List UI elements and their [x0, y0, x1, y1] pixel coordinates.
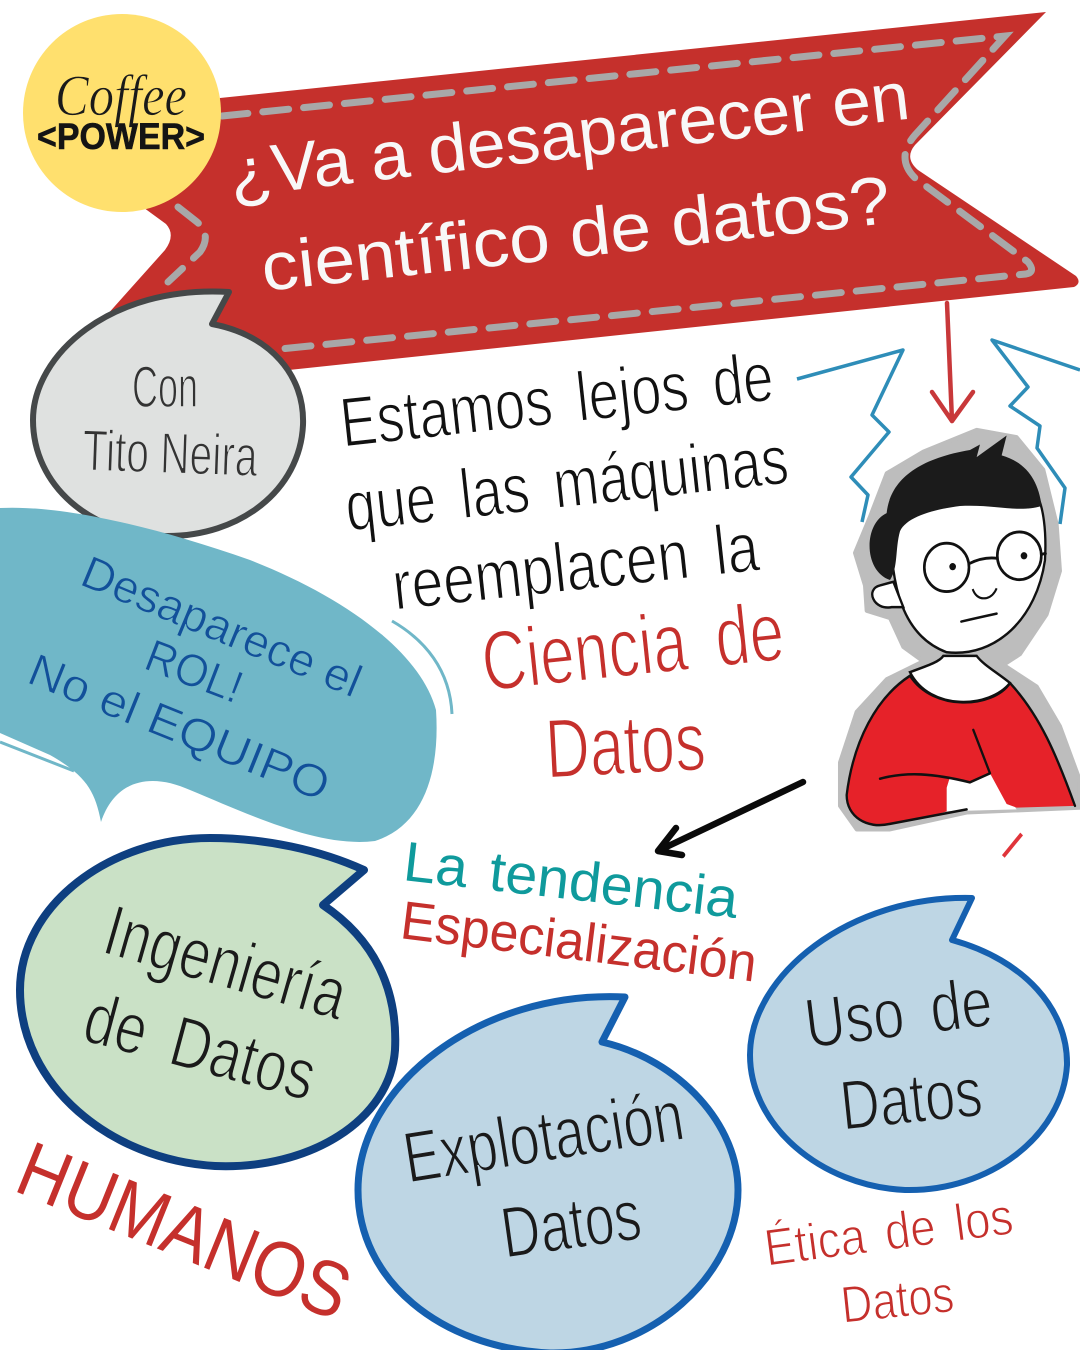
highlighted text: Ciencia de Datos	[477, 584, 788, 796]
speech bubble: Con Tito Neira: Con	[132, 355, 198, 420]
text: Ética de los Datos: Datos	[838, 1265, 957, 1335]
lightning bolts	[797, 340, 1080, 524]
speech bubble: Ingeniería de Datos	[20, 838, 395, 1166]
body text: Estamos lejos	[336, 337, 792, 625]
text: Especialización: Especialización	[398, 890, 760, 994]
logo: Coffee Power: Coffee	[55, 63, 187, 128]
speech bubble: Uso de Datos: Uso de	[800, 963, 996, 1063]
body text: Estamos lejos: que las máquinas	[341, 420, 792, 546]
speech bubble: rol y equipo: No el EQUIPO	[21, 643, 337, 811]
illustration: worried man	[840, 430, 1080, 856]
speech bubble: Ingeniería de Datos: de Datos	[76, 978, 325, 1117]
black arrow	[658, 782, 803, 855]
title: ¿Va a desaparecer en	[225, 58, 913, 212]
logo: Coffee Power: <POWER>	[37, 116, 205, 157]
highlighted text: Ciencia de Datos: Datos	[543, 694, 708, 796]
speech bubble: rol y equipo: Desaparece el	[74, 545, 369, 707]
title: científico de datos?	[257, 162, 894, 306]
speech bubble: Explotación Datos	[358, 997, 738, 1350]
speech bubble: Uso de Datos: Datos	[836, 1053, 986, 1145]
speech bubble: rol y equipo	[0, 508, 452, 842]
text: Ética de los Datos	[761, 1188, 1016, 1335]
text: HUMANOS: HUMANOS	[6, 1124, 363, 1337]
speech bubble: Con Tito Neira	[33, 292, 303, 536]
title	[225, 58, 913, 306]
body text: Estamos lejos: Estamos lejos de	[336, 337, 777, 462]
text: La tendencia: La tendencia	[401, 829, 742, 930]
speech bubble: Explotación Datos: Explotación	[398, 1076, 689, 1199]
speech bubble: Ingeniería de Datos: Ingeniería	[96, 890, 357, 1036]
speech bubble: rol y equipo: ROL!	[138, 629, 250, 713]
speech bubble: Uso de Datos	[750, 898, 1067, 1190]
logo: Coffee Power	[23, 14, 221, 212]
text: Ética de los Datos: Ética de los	[761, 1188, 1016, 1278]
speech bubble: Con Tito Neira: Tito Neira	[82, 418, 259, 489]
speech bubble: Explotación Datos: Datos	[496, 1175, 646, 1274]
red arrow	[932, 303, 973, 421]
highlighted text: Ciencia de Datos: Ciencia de	[477, 584, 788, 709]
body text: Estamos lejos: reemplacen la	[388, 508, 763, 625]
red title banner	[98, 12, 1079, 372]
